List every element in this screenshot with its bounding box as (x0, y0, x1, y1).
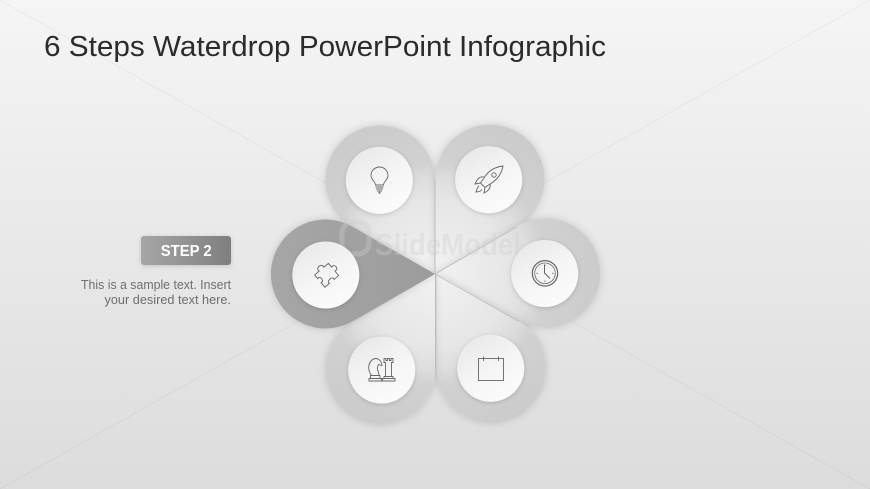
watermark: .com (521, 247, 541, 257)
icon: rocket (475, 166, 503, 193)
drop: rocket step (435, 125, 544, 274)
icon: light bulb (371, 167, 388, 193)
title: 6 Steps Waterdrop PowerPoint Infographic (44, 31, 606, 63)
disc: calendar (457, 335, 524, 402)
step 2 badge: STEP 2 (161, 243, 212, 260)
icon: puzzle piece (312, 258, 342, 287)
waterdrop diagram (271, 125, 600, 424)
disc: clock (511, 240, 578, 307)
drop: puzzle step (active) (271, 219, 435, 328)
step 2 badge (141, 236, 231, 265)
step description: your desired text here. (104, 292, 231, 307)
drop: calendar step (436, 274, 546, 423)
disc: rocket (455, 146, 522, 213)
step description (81, 277, 231, 307)
step description: This is a sample text. Insert (81, 277, 231, 292)
drop: chess step (326, 274, 435, 424)
drop edge seams (435, 180, 518, 368)
icon: calendar (478, 356, 504, 380)
drop: bulb step (326, 125, 435, 274)
watermark: SlideModel (375, 227, 521, 262)
icon: chess pieces (369, 358, 395, 381)
icon: clock (532, 261, 558, 286)
disc: puzzle (292, 242, 359, 308)
drop: clock step (435, 218, 600, 328)
disc: bulb (346, 147, 413, 214)
disc: chess (348, 336, 415, 404)
